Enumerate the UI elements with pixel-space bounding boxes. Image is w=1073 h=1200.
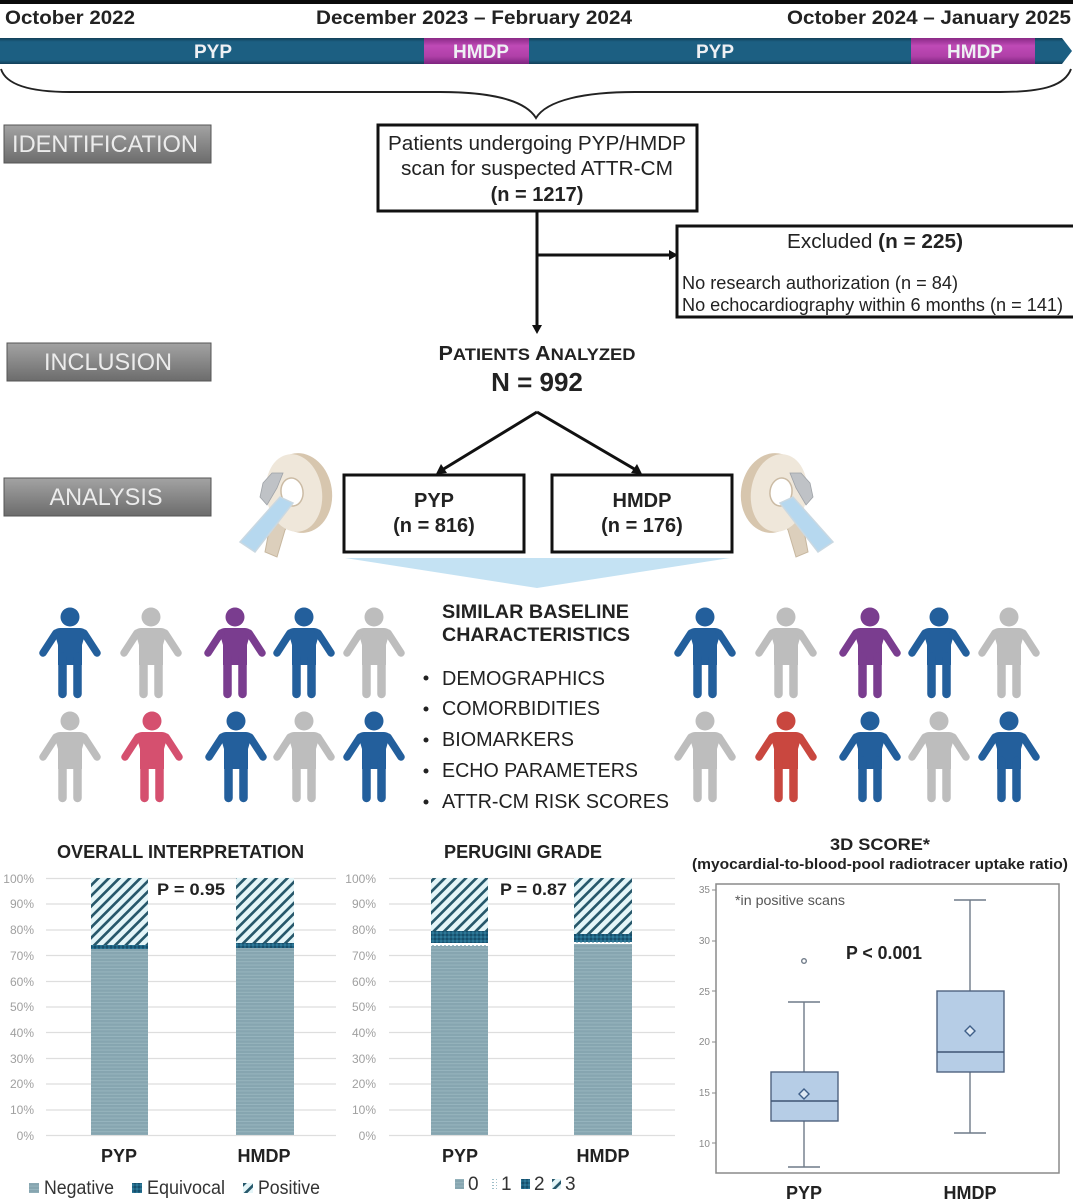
y axis: 35	[699, 885, 710, 896]
arrows: split to PYP and HMDP	[436, 412, 642, 474]
y axis labels: 80%	[352, 923, 376, 937]
y axis labels: 0%	[359, 1129, 376, 1143]
y axis: 25	[699, 987, 710, 998]
category labels	[101, 1146, 290, 1166]
y axis labels: 100%	[345, 872, 376, 886]
list: baseline characteristics: BIOMARKERS	[442, 729, 574, 751]
legend: Equivocal	[147, 1178, 225, 1199]
timeline bar: PYP	[194, 42, 232, 63]
p value: P = 0.87	[500, 880, 567, 899]
y axis labels: 10%	[352, 1103, 376, 1117]
y axis labels: 20%	[10, 1077, 34, 1091]
timeline bar: PYP	[696, 42, 734, 63]
y axis labels	[3, 872, 34, 1143]
timeline bar: HMDP	[947, 42, 1003, 63]
chart: overall interpretation	[3, 842, 336, 1199]
PYP stacked bar	[431, 878, 488, 1135]
y axis: 30	[699, 936, 710, 947]
stage label: inclusion	[7, 343, 211, 381]
stage label: identification	[4, 125, 211, 163]
list: baseline characteristics: DEMOGRAPHICS	[442, 668, 605, 690]
legend: 1	[501, 1174, 512, 1195]
funnel triangle	[345, 558, 730, 588]
heading: similar baseline characteristics: CHARACTERISTICS	[442, 625, 630, 646]
chart title: 3D SCORE*	[830, 835, 930, 854]
chart title: OVERALL INTERPRETATION	[57, 842, 304, 862]
category labels: PYP	[442, 1146, 478, 1166]
timeline dates	[5, 8, 1071, 29]
legend: 0	[468, 1174, 479, 1195]
box: patients undergoing scan	[378, 125, 697, 211]
box: excluded patients	[677, 226, 1073, 317]
HMDP stacked bar	[236, 878, 294, 1135]
footnote: *in positive scans	[735, 892, 845, 908]
arrow: screening to analyzed	[532, 211, 542, 334]
box: HMDP group	[552, 475, 732, 552]
y axis labels: 50%	[352, 1000, 376, 1014]
y axis: 15	[699, 1088, 710, 1099]
chart title	[692, 835, 1068, 873]
timeline dates: December 2023 – February 2024	[316, 8, 632, 29]
stage label: inclusion: INCLUSION	[44, 349, 172, 376]
box: PYP group: PYP	[414, 490, 454, 512]
HMDP box	[937, 900, 1004, 1133]
timeline dates: October 2024 – January 2025	[787, 8, 1071, 29]
heading: patients analyzed: PATIENTS ANALYZED	[438, 343, 636, 365]
stage label: identification: IDENTIFICATION	[12, 131, 198, 158]
y axis labels: 30%	[10, 1052, 34, 1066]
stage label: analysis	[4, 478, 211, 516]
icon: scanner right	[736, 449, 833, 557]
legend: 3	[565, 1174, 576, 1195]
timeline bar	[0, 38, 1072, 64]
box: excluded patients: No research authorization (n = 84)	[682, 273, 958, 293]
y axis labels: 60%	[10, 975, 34, 989]
p value: P < 0.001	[846, 943, 922, 963]
chart title: PERUGINI GRADE	[444, 842, 602, 862]
category labels: HMDP	[238, 1146, 290, 1166]
y axis	[699, 885, 716, 1150]
box: patients undergoing scan: (n = 1217)	[491, 184, 583, 206]
heading: similar baseline characteristics	[442, 602, 630, 646]
box: excluded patients: No echocardiography within 6 months (n = 141)	[682, 295, 1063, 315]
p value: P = 0.95	[157, 880, 225, 899]
y axis: 10	[699, 1139, 710, 1150]
arrow: to excluded	[537, 250, 678, 260]
y axis labels: 20%	[352, 1077, 376, 1091]
y axis labels: 50%	[10, 1000, 34, 1014]
y axis labels: 0%	[17, 1129, 34, 1143]
brace spanning the timeline	[1, 69, 1071, 118]
heading: similar baseline characteristics: SIMILAR BASELINE	[442, 602, 629, 623]
box: excluded patients: Excluded (n = 225)	[787, 231, 963, 253]
list: baseline characteristics: ATTR-CM RISK SCORES	[442, 791, 669, 813]
icon: scanner left	[240, 449, 337, 557]
y axis labels: 100%	[3, 872, 34, 886]
box: PYP group: (n = 816)	[393, 515, 475, 537]
y axis labels: 70%	[10, 949, 34, 963]
box: patients undergoing scan: scan for suspected ATTR-CM	[401, 158, 673, 180]
box: HMDP group: HMDP	[613, 490, 671, 512]
category labels: PYP	[101, 1146, 137, 1166]
category labels	[442, 1146, 630, 1166]
legend: 2	[534, 1174, 545, 1195]
stage label: analysis: ANALYSIS	[50, 484, 162, 511]
y axis: 20	[699, 1037, 710, 1048]
y axis labels: 80%	[10, 923, 34, 937]
y axis labels: 10%	[10, 1103, 34, 1117]
timeline dates: October 2022	[5, 8, 135, 29]
PYP stacked bar	[91, 878, 148, 1135]
chart: 3D score box plot	[692, 835, 1068, 1200]
category labels	[786, 1183, 996, 1200]
legend	[455, 1174, 576, 1195]
timeline bar: HMDP	[453, 42, 509, 63]
legend	[29, 1178, 320, 1199]
box: HMDP group: (n = 176)	[601, 515, 683, 537]
list: baseline characteristics	[424, 668, 669, 813]
people group: HMDP	[678, 608, 1036, 798]
legend: Positive	[258, 1178, 320, 1199]
y axis labels: 30%	[352, 1052, 376, 1066]
PYP box	[771, 959, 838, 1167]
y axis labels: 40%	[352, 1026, 376, 1040]
people group: PYP	[43, 608, 401, 798]
y axis labels: 60%	[352, 975, 376, 989]
heading: patients analyzed	[438, 343, 636, 397]
legend: Negative	[44, 1178, 114, 1199]
HMDP stacked bar	[574, 878, 632, 1135]
y axis labels: 70%	[352, 949, 376, 963]
box: PYP group	[344, 475, 524, 552]
chart title: (myocardial-to-blood-pool radiotracer uptake ratio)	[692, 856, 1068, 873]
y axis labels: 90%	[352, 897, 376, 911]
category labels: HMDP	[576, 1146, 630, 1166]
list: baseline characteristics: COMORBIDITIES	[442, 698, 600, 720]
box: patients undergoing scan: Patients undergoing PYP/HMDP	[388, 133, 686, 155]
y axis labels: 40%	[10, 1026, 34, 1040]
y axis labels: 90%	[10, 897, 34, 911]
heading: patients analyzed: N = 992	[491, 367, 583, 397]
list: baseline characteristics: ECHO PARAMETERS	[442, 760, 638, 782]
chart: Perugini grade	[345, 842, 675, 1195]
y axis labels	[345, 872, 376, 1143]
